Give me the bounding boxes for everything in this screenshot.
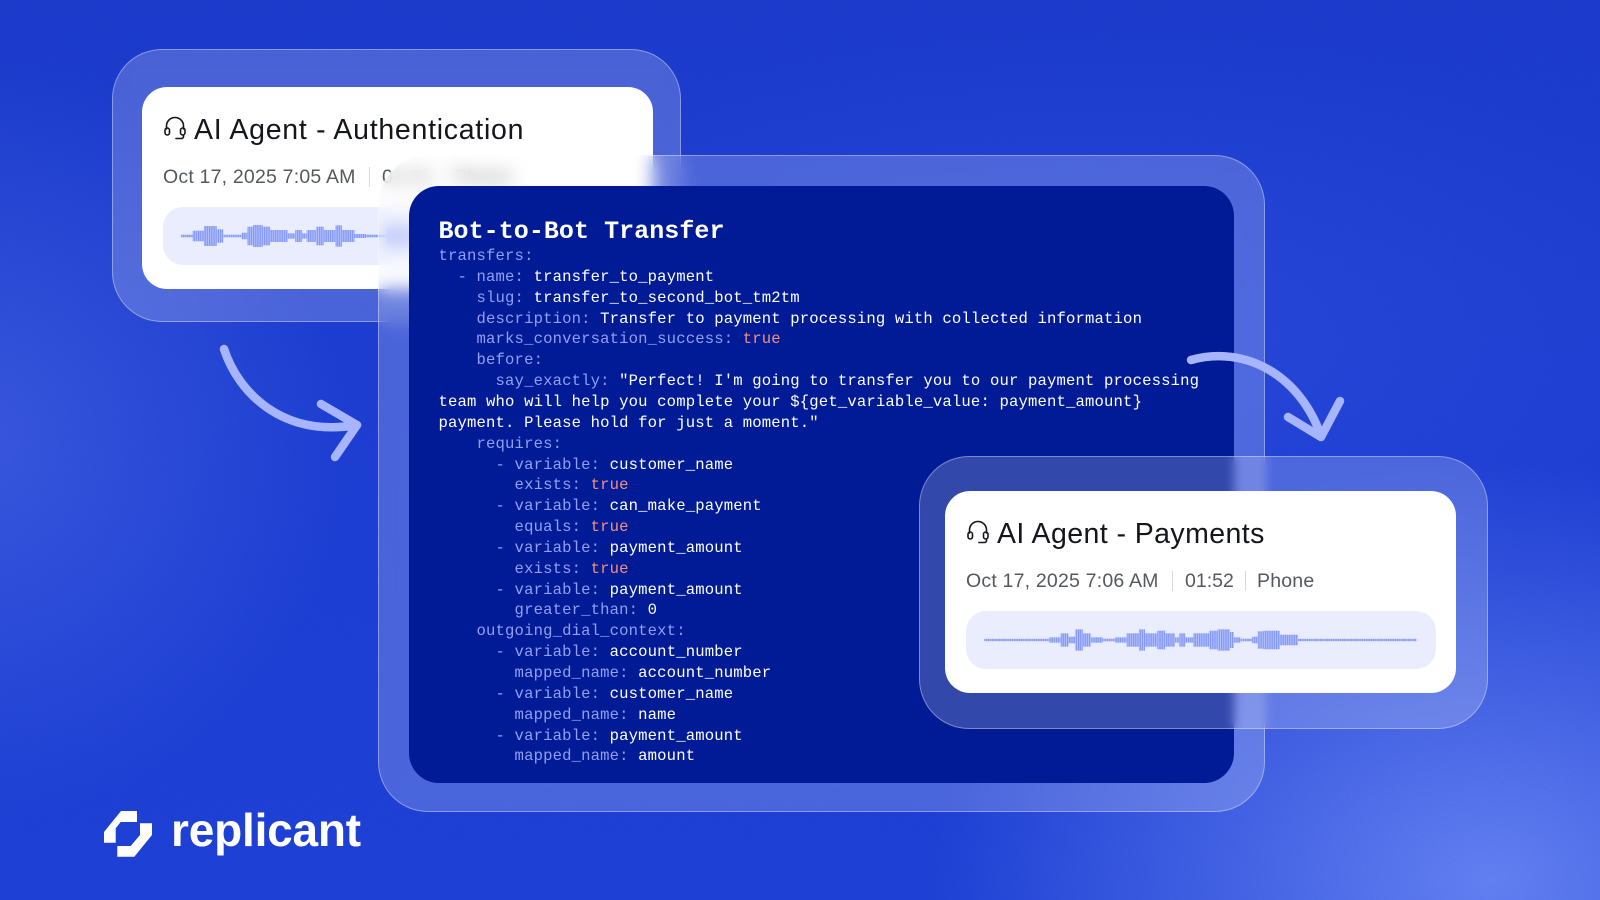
date: Oct 17, 2025 7:06 AM — [966, 570, 1159, 592]
panel: AI Agent Authentication — [112, 49, 681, 322]
duration: 01:52 — [1185, 570, 1234, 592]
channel: Phone — [1257, 570, 1314, 592]
panel: AI Agent Payments — [919, 456, 1488, 729]
code block: transfers: - name: transfer_to_payment slug: transfer_to_second_bot_tm2tm description: Transfer to payment processing with collected information marks_conversation_success: true before: say_exactly: "Perfect! I'm going to transfer you to our payment processing team who will help you complete your ${get_variable_value: payment_amount} payment. Please hold for just a moment." requires: - variable: customer_name exists: true - variable: can_make_payment equals: true - variable: payment_amount exists: true - variable: payment_amount greater_than: 0 outgoing_dial_context: - variable: account_number mapped_name: account_number - variable: customer_name mapped_name: name - variable: payment_amount mapped_name: amount — [438, 247, 1199, 765]
waveform — [163, 206, 633, 264]
date: Oct 17, 2025 7:05 AM — [163, 166, 356, 188]
panel: Bot-to-Bot Transfer — [378, 155, 1265, 812]
icon: replicant mark — [104, 811, 152, 857]
code panel — [408, 186, 1234, 782]
channel: Phone — [454, 166, 511, 188]
arrow: transfer to payments — [1186, 352, 1344, 442]
card: authentication call — [142, 86, 653, 288]
arrow: authentication to transfer — [220, 344, 362, 462]
waveform — [966, 610, 1436, 668]
card: payments call — [945, 490, 1456, 692]
wordmark: replicant — [171, 804, 361, 856]
icon: headset — [967, 520, 989, 544]
heading: Bot-to-Bot Transfer: Bot-to-Bot Transfer — [438, 216, 724, 246]
duration: 01:21 — [382, 166, 432, 188]
heading: agent name: AI Agent - Authentication — [194, 114, 524, 146]
logo: replicant — [104, 804, 361, 857]
icon: headset — [164, 116, 186, 140]
heading: agent name: AI Agent - Payments — [997, 518, 1265, 550]
